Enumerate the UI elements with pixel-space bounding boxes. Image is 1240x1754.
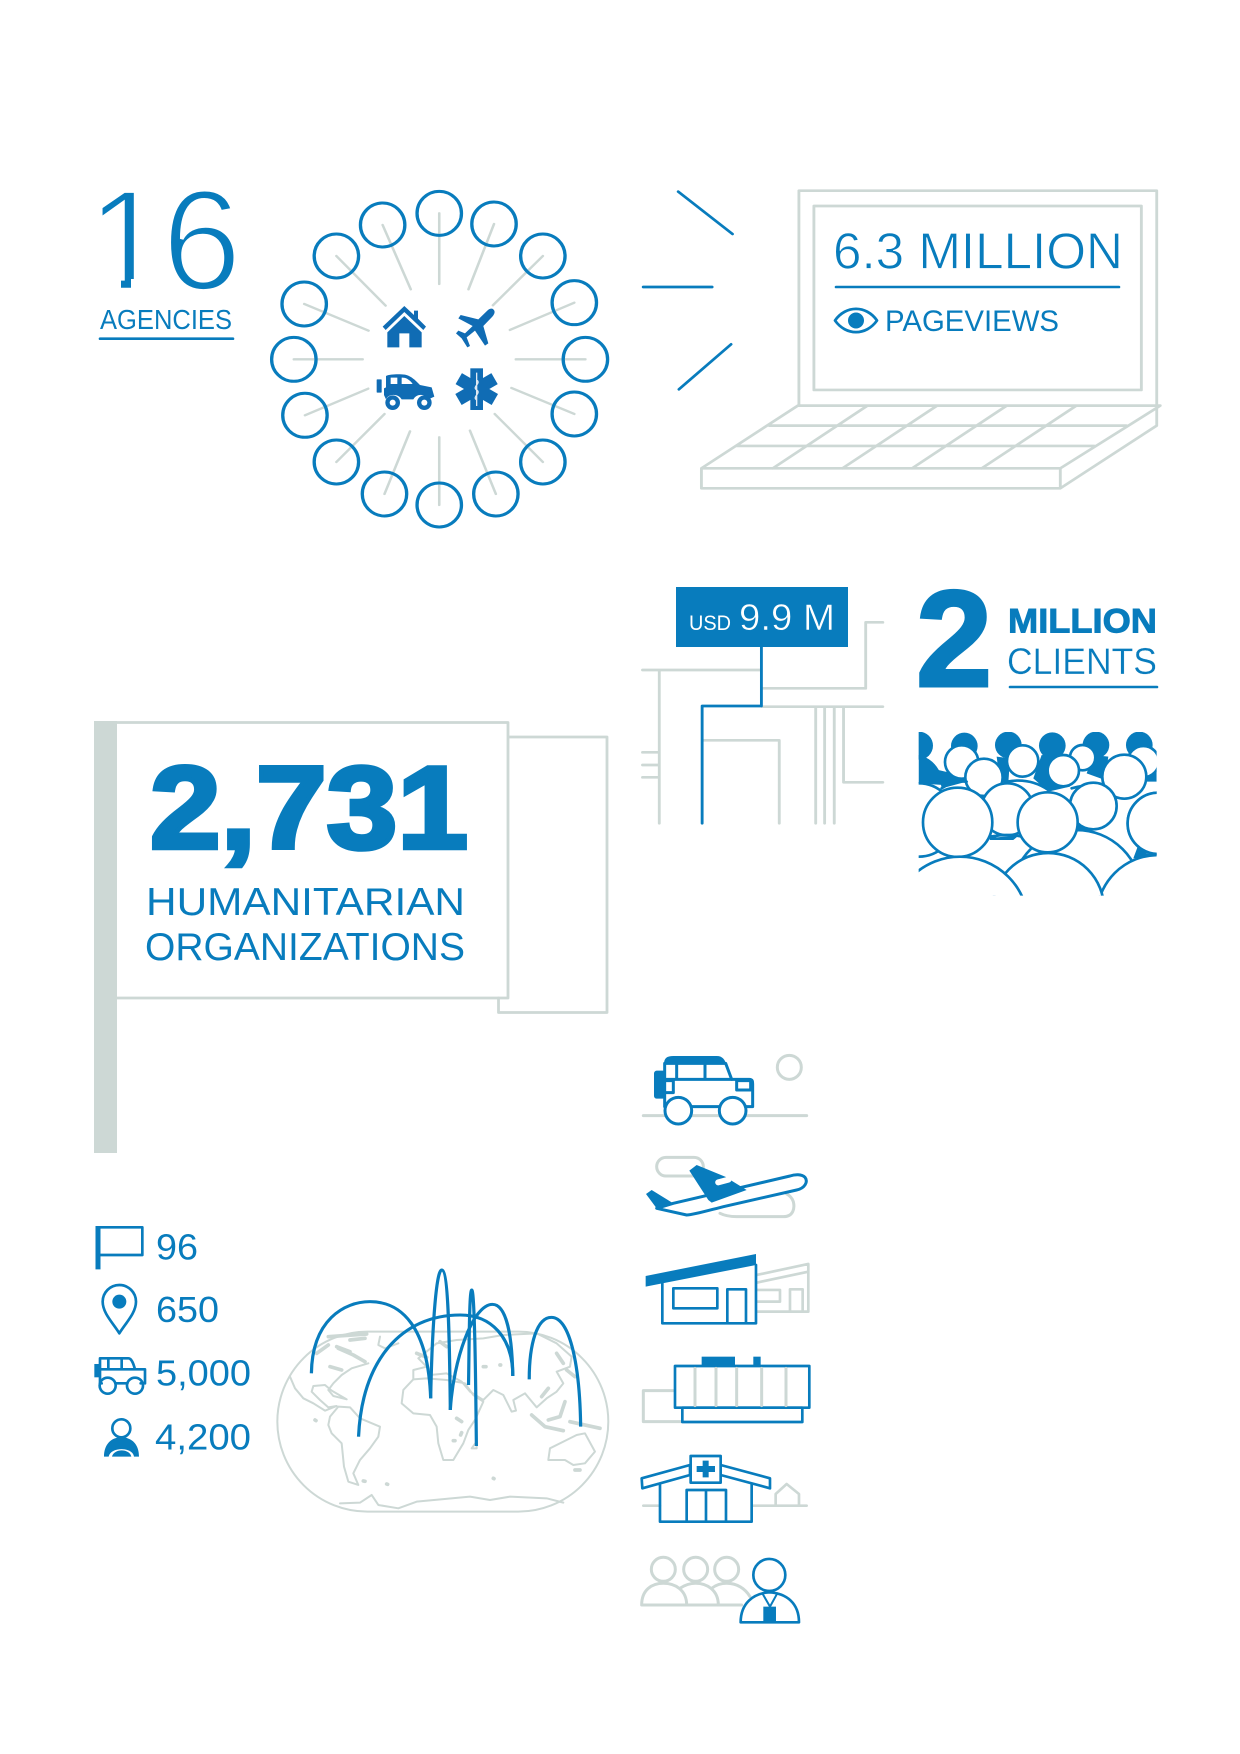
stat: countries: 96 (156, 1226, 198, 1268)
icon: person (104, 1419, 139, 1457)
illustration: plane (646, 1157, 806, 1217)
funding tag (676, 587, 848, 647)
clients stat: MILLION (1008, 603, 1157, 641)
illustration: vehicle (643, 1055, 807, 1124)
laptop screen stat: 6.3 MILLION (833, 222, 1123, 280)
stat: staff: 4,200 (155, 1416, 251, 1458)
stat: sites: 650 (156, 1289, 219, 1330)
world map (277, 1332, 608, 1512)
clients stat: 2 (916, 563, 992, 716)
clients stat: CLIENTS (1007, 641, 1157, 682)
crowd illustration (918, 732, 1157, 896)
route arcs over map (311, 1270, 581, 1446)
laptop screen stat (833, 222, 1123, 338)
icon: house (383, 306, 426, 347)
flag pole (94, 721, 117, 1153)
agencies ring diagram (272, 191, 608, 527)
organizations count: 2,731 (150, 742, 468, 873)
agencies count: 16: 16 (87, 162, 242, 320)
back flag panel (498, 737, 607, 1012)
funding lines (642, 622, 883, 823)
organizations label: ORGANIZATIONS (145, 926, 465, 969)
agencies label: AGENCIES (100, 304, 232, 335)
icon: location pin (103, 1285, 136, 1333)
icon: vehicle (94, 1358, 145, 1394)
organizations label: HUMANITARIAN (146, 881, 465, 924)
icon: star of life (455, 368, 498, 410)
funding tag: 9.9 M (739, 597, 835, 638)
icon: flag (98, 1226, 142, 1269)
funding tag: USD (689, 612, 731, 635)
icon: plane (456, 309, 495, 347)
illustration: warehouse (643, 1357, 809, 1422)
front flag panel (117, 722, 508, 998)
clients stat (916, 563, 1157, 716)
icon: eye (835, 309, 877, 332)
laptop screen stat: PAGEVIEWS (885, 305, 1059, 338)
icon: jeep (377, 374, 434, 410)
organizations label (145, 881, 465, 969)
laptop (701, 191, 1160, 488)
radiating lines (643, 192, 732, 389)
illustration: people (642, 1557, 799, 1622)
illustration: office (646, 1254, 808, 1323)
illustration: clinic (642, 1456, 807, 1522)
stat: vehicles: 5,000 (156, 1352, 251, 1394)
